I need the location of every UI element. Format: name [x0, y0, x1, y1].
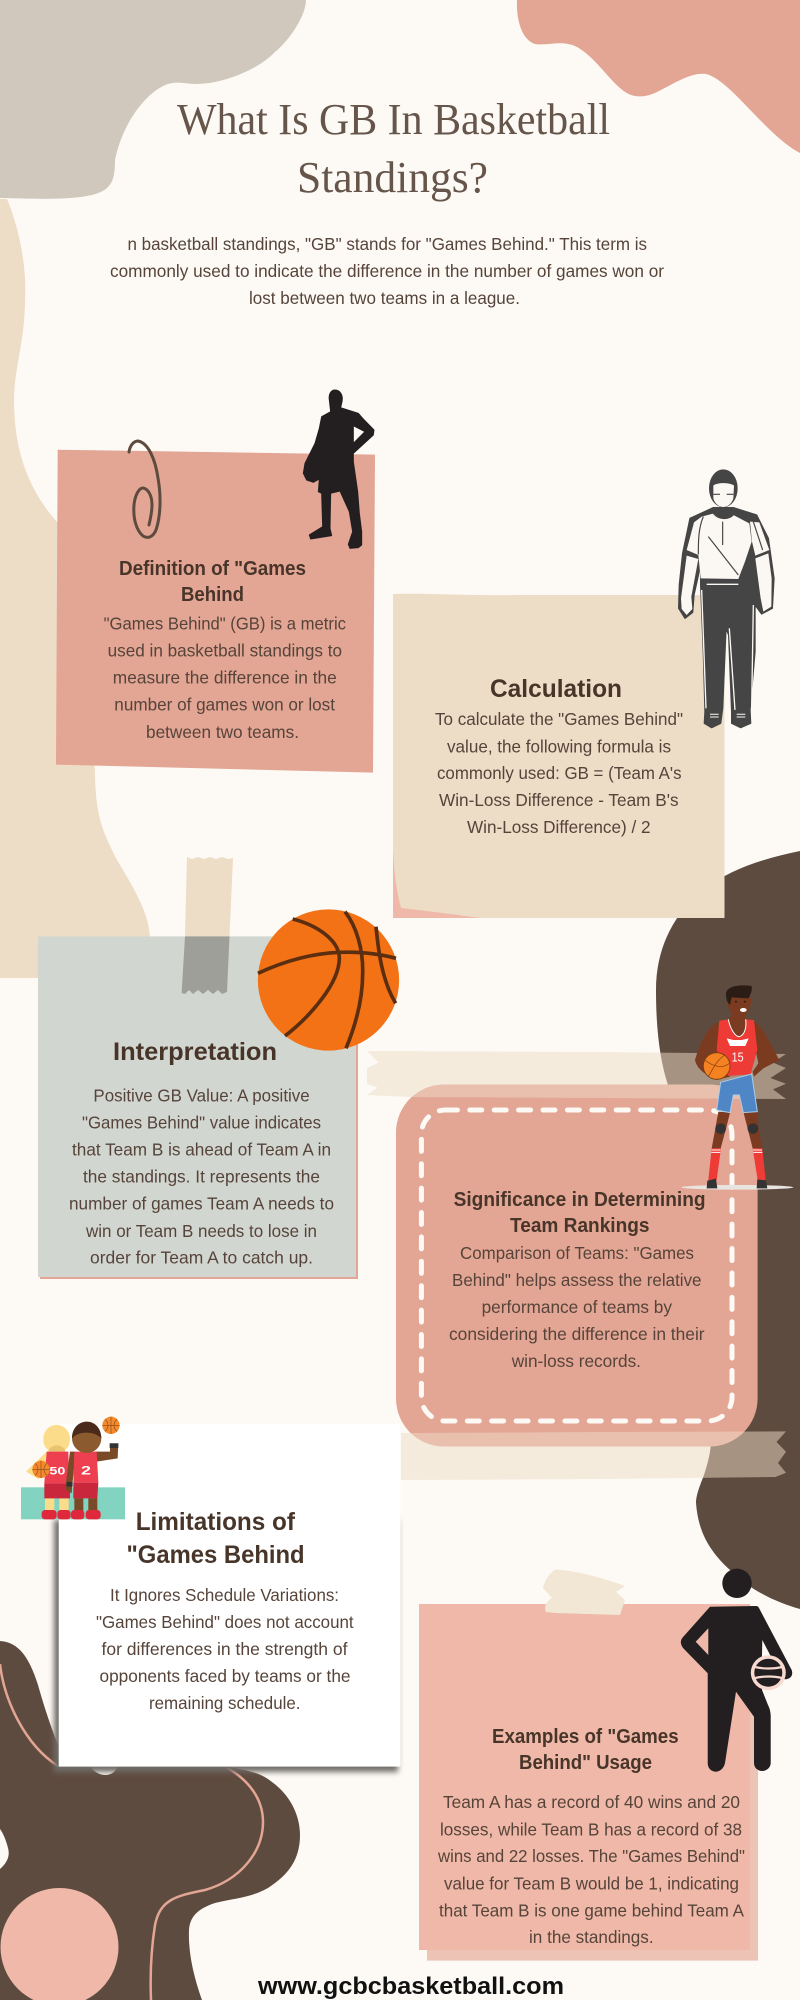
- tape: interpretation: [182, 857, 233, 994]
- body: examples: value for Team B would be 1, indicating: [444, 1874, 739, 1894]
- body: limitations: opponents faced by teams or the: [100, 1666, 350, 1686]
- body: significance: [449, 1243, 705, 1371]
- heading: calculation: Calculation: [490, 675, 622, 703]
- title: [177, 95, 610, 202]
- heading: definition: Behind: [181, 584, 244, 606]
- body: examples: [437, 1792, 745, 1947]
- panel: definition: [56, 450, 375, 773]
- body: limitations: for differences in the strength of: [102, 1639, 348, 1659]
- body: significance: win-loss records.: [511, 1351, 641, 1371]
- body: calculation: To calculate the "Games Behind": [435, 709, 683, 729]
- panel shadow: [40, 938, 358, 1279]
- body: significance: considering the difference in their: [449, 1324, 705, 1344]
- body: interpretation: [69, 1086, 334, 1268]
- body: definition: number of games won or lost: [114, 695, 335, 715]
- panel: interpretation: [38, 936, 358, 1279]
- tape: bottom of significance: [401, 1431, 786, 1480]
- panel: examples: [419, 1604, 758, 1961]
- intro text: commonly used to indicate the difference in the number of games won or: [110, 261, 664, 281]
- body: definition: measure the difference in the: [113, 668, 337, 688]
- decorative curve: pink line on blob: [0, 1664, 263, 2000]
- body: limitations: remaining schedule.: [149, 1693, 300, 1713]
- body: definition: [104, 614, 346, 742]
- dashed border: [421, 1110, 732, 1421]
- body: limitations: "Games Behind" does not account: [96, 1612, 354, 1632]
- intro text: lost between two teams in a league.: [249, 288, 520, 308]
- heading: significance: Team Rankings: [510, 1215, 650, 1237]
- icon: man silhouette with ball: [681, 1569, 792, 1772]
- heading: examples: [492, 1726, 679, 1774]
- decorative circle: pink: [0, 1888, 118, 2000]
- heading: interpretation: Interpretation: [113, 1038, 277, 1066]
- body: limitations: [96, 1585, 354, 1713]
- heading: significance: Significance in Determining: [454, 1189, 706, 1211]
- ball: [751, 1655, 786, 1690]
- body: examples: that Team B is one game behind Team A: [439, 1901, 744, 1921]
- panel background: definition: [56, 450, 375, 773]
- body: interpretation: "Games Behind" value indicates: [82, 1112, 321, 1132]
- panel background: interpretation: [38, 936, 356, 1277]
- body: significance: Behind" helps assess the relative: [452, 1270, 702, 1290]
- pink corner: [393, 850, 485, 918]
- body: interpretation: number of games Team A needs to: [69, 1194, 334, 1214]
- panel: significance: [396, 1084, 758, 1446]
- background blob: grey top left: [0, 0, 306, 199]
- body: calculation: value, the following formula is: [447, 736, 671, 756]
- title: Standings?: [297, 153, 488, 202]
- body: interpretation: win or Team B needs to lose in: [85, 1221, 317, 1241]
- panel: limitations: [54, 1424, 400, 1772]
- heading: limitations: "Games Behind: [126, 1541, 305, 1569]
- icon: player number 15: [681, 985, 793, 1190]
- icon: two cartoon players: [21, 1417, 125, 1519]
- body: calculation: [435, 709, 683, 837]
- background blob: dark bottom left: [0, 1641, 300, 2000]
- title: What Is GB In Basketball: [177, 95, 610, 144]
- background blob: pink top right: [517, 0, 800, 153]
- body: calculation: commonly used: GB = (Team A's: [437, 763, 682, 783]
- heading: examples: Examples of "Games: [492, 1726, 679, 1748]
- body: significance: performance of teams by: [482, 1297, 672, 1317]
- body: calculation: Win-Loss Difference) / 2: [467, 817, 650, 837]
- icon: player number 15: 15: [732, 1050, 744, 1065]
- heading: limitations: [126, 1508, 305, 1569]
- panel background: calculation: [393, 594, 724, 918]
- heading: significance: [454, 1189, 706, 1237]
- heading: definition: Definition of "Games: [119, 558, 306, 580]
- body: examples: in the standings.: [529, 1927, 654, 1947]
- body: significance: Comparison of Teams: "Games: [460, 1243, 694, 1263]
- panel: calculation: [393, 594, 724, 918]
- body: limitations: It Ignores Schedule Variations:: [110, 1585, 339, 1605]
- body: definition: "Games Behind" (GB) is a metric: [104, 614, 346, 634]
- body: interpretation: the standings. It represents the: [83, 1166, 320, 1186]
- icon: two cartoon players: 2: [81, 1463, 91, 1477]
- body: examples: wins and 22 losses. The "Games Behind": [437, 1846, 745, 1866]
- icon: paperclip spiral: [129, 441, 160, 537]
- icon: player silhouette with ball: [303, 390, 374, 548]
- heading: definition: [119, 558, 306, 606]
- body: definition: between two teams.: [146, 722, 299, 742]
- body: definition: used in basketball standings to: [108, 641, 342, 661]
- background blob: dark right: [656, 851, 800, 1609]
- panel background: limitations: [59, 1424, 400, 1767]
- icon: two cartoon players: 50: [49, 1465, 65, 1477]
- heading: examples: Behind" Usage: [519, 1752, 652, 1774]
- panel background: significance: [396, 1084, 758, 1446]
- icon: basketball: [258, 909, 399, 1051]
- footer url: www.gcbcbasketball.com: [257, 1973, 564, 2000]
- body: examples: losses, while Team B has a record of 38: [440, 1820, 742, 1840]
- intro text: n basketball standings, "GB" stands for "Games Behind." This term is: [128, 234, 647, 254]
- body: interpretation: order for Team A to catch up.: [90, 1248, 313, 1268]
- background blob: beige left: [0, 199, 150, 978]
- panel shadow: [54, 1520, 398, 1772]
- body: examples: Team A has a record of 40 wins and 20: [443, 1792, 740, 1812]
- intro text: [110, 234, 664, 308]
- heading: limitations: Limitations of: [136, 1508, 296, 1536]
- panel shadow: [427, 1620, 758, 1961]
- panel background: examples: [419, 1604, 750, 1950]
- body: calculation: Win-Loss Difference - Team B's: [439, 790, 679, 810]
- tape: examples: [543, 1570, 625, 1615]
- tape: top of significance: [367, 1051, 786, 1099]
- body: interpretation: that Team B is ahead of Team A in: [72, 1140, 331, 1160]
- body: interpretation: Positive GB Value: A positive: [93, 1086, 310, 1106]
- icon: referee: [679, 469, 774, 728]
